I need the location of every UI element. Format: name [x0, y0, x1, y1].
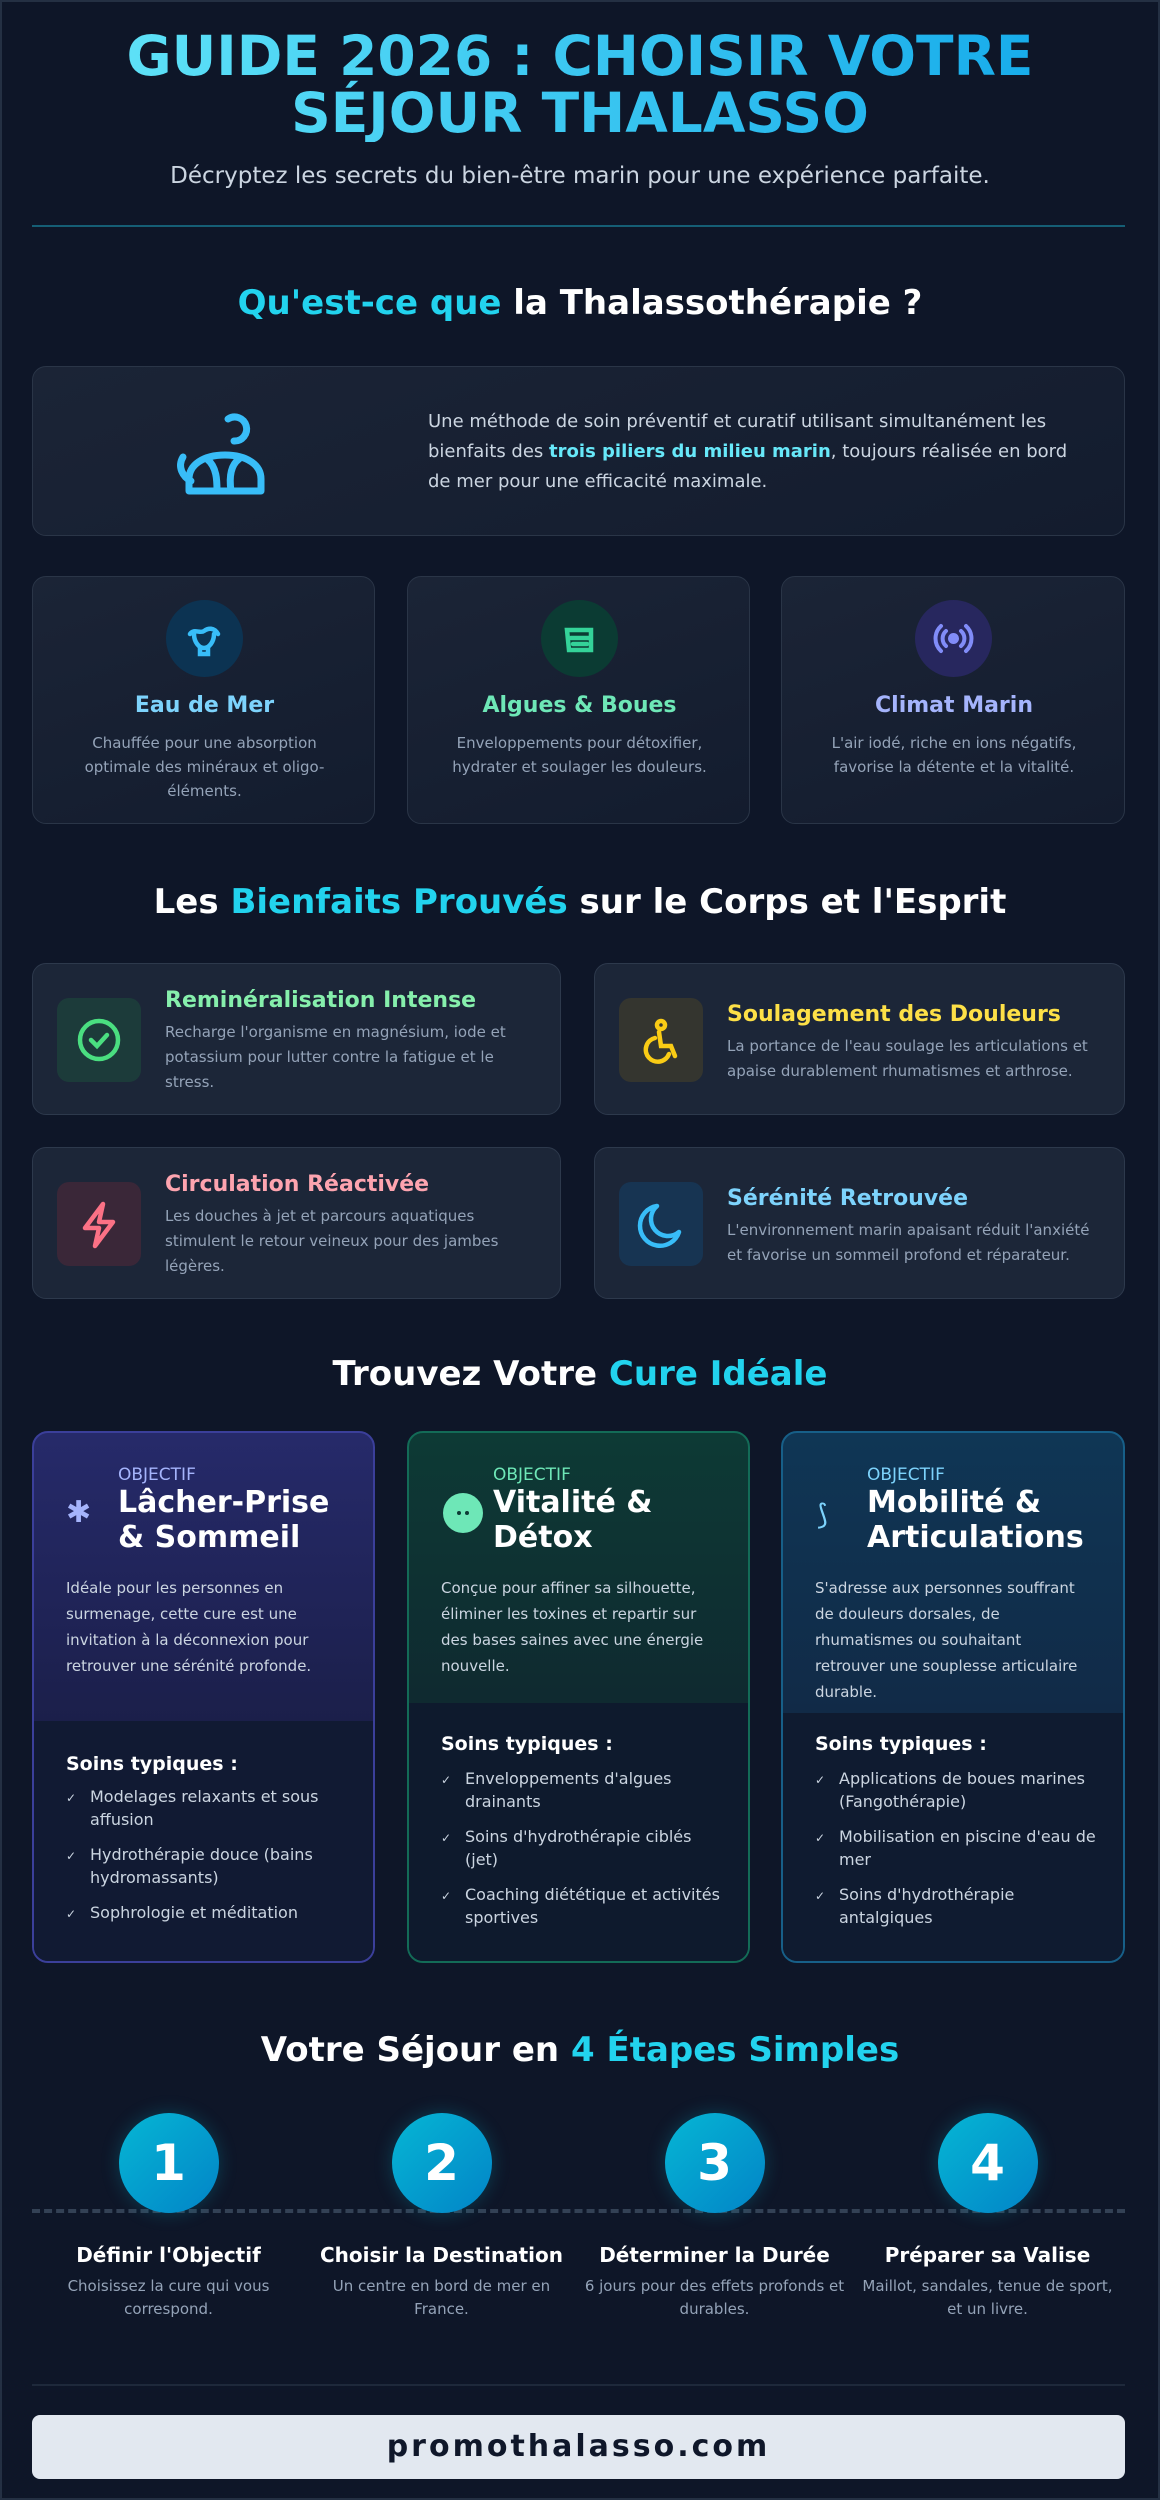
heading: cure: Trouvez Votre Cure Idéale: [333, 1354, 827, 1394]
step 2: Choisir la Destination: [320, 2243, 563, 2267]
panel: cure lacher-prise: OBJECTIF: [118, 1465, 196, 1485]
list: soins: [68, 1787, 318, 1922]
icon: seaweed: [541, 600, 618, 677]
icon: joint: ⟆: [817, 1498, 828, 1531]
step 1: [68, 2107, 269, 2318]
icon: check: [57, 998, 141, 1082]
icon: spa person: [177, 413, 264, 494]
panel: eau de mer: [32, 576, 375, 824]
list: soins: Enveloppements d'algues drainants: [465, 1769, 672, 1811]
panel: remineralisation: Reminéralisation Intense: [165, 988, 476, 1013]
panel: eau de mer: Chauffée pour une absorption optimale des minéraux et oligo-éléments.: [85, 734, 324, 800]
step 4: Préparer sa Valise: [885, 2243, 1090, 2267]
title: [0, 28, 1160, 142]
icon: wheelchair: [619, 998, 703, 1082]
footer: website: [32, 2415, 1125, 2479]
footer: website: promothalasso.com: [387, 2429, 770, 2464]
panel: serenite: [594, 1147, 1125, 1299]
step 3: [585, 2107, 844, 2318]
panel: cure vitalite: Conçue pour affiner sa silhouette, éliminer les toxines et repartir sur des bases saines avec une énergie nouvelle.: [441, 1579, 703, 1675]
panel: cure lacher-prise: Idéale pour les personnes en surmenage, cette cure est une invitation à la déconnexion pour retrouver une sérénité profonde.: [66, 1579, 311, 1675]
icon: moon: [619, 1182, 703, 1266]
icon: broadcast: [915, 600, 992, 677]
list: soins: Mobilisation en piscine d'eau de mer: [839, 1827, 1096, 1869]
panel: douleurs: [594, 963, 1125, 1115]
panel: climat: [781, 576, 1125, 824]
subtitle: Décryptez les secrets du bien-être marin pour une expérience parfaite.: [170, 163, 990, 189]
list: soins: Sophrologie et méditation: [90, 1903, 298, 1922]
panel: cure lacher-prise: [32, 1431, 375, 1963]
step 2: 2: [424, 2134, 459, 2192]
step 4: et un livre.: [947, 2300, 1028, 2318]
icon: water: [166, 600, 243, 677]
panel: serenite: Sérénité Retrouvée: [727, 1186, 968, 1211]
heading: bienfaits: Les Bienfaits Prouvés sur le Corps et l'Esprit: [154, 882, 1006, 922]
list: soins: Soins d'hydrothérapie ciblés (jet): [465, 1827, 691, 1869]
panel: cure vitalite: OBJECTIF: [493, 1465, 571, 1485]
title: GUIDE 2026 : CHOISIR VOTRE: [126, 24, 1034, 88]
list: soins: [816, 1769, 1096, 1927]
step 3: Déterminer la Durée: [599, 2243, 830, 2267]
step 1: Définir l'Objectif: [76, 2243, 261, 2267]
icon: face: [443, 1493, 483, 1533]
title: SÉJOUR THALASSO: [291, 81, 869, 145]
list: soins: Coaching diététique et activités sportives: [465, 1885, 720, 1927]
panel: algues: Algues & Boues: [482, 693, 677, 718]
list: soins: Modelages relaxants et sous affusion: [90, 1787, 318, 1829]
panel: cure mobilite: S'adresse aux personnes souffrant de douleurs dorsales, de rhumatismes ou souhaitant retrouver une souplesse articulaire durable.: [815, 1579, 1077, 1701]
list: soins: [442, 1769, 720, 1927]
panel: remineralisation: [32, 963, 561, 1115]
step 1: Choisissez la cure qui vous: [68, 2277, 269, 2295]
panel: climat: Climat Marin: [875, 693, 1033, 718]
step 1: correspond.: [124, 2300, 213, 2318]
panel: cure lacher-prise: Lâcher-Prise: [118, 1485, 329, 1520]
panel: cure mobilite: Mobilité &: [867, 1485, 1041, 1520]
panel: cure lacher-prise: & Sommeil: [118, 1520, 300, 1555]
icon: puzzle: ✱: [66, 1495, 91, 1530]
panel: cure mobilite: Soins typiques :: [815, 1733, 987, 1755]
panel: serenite: L'environnement marin apaisant réduit l'anxiété et favorise un sommeil profond et réparateur.: [727, 1221, 1089, 1264]
step 3: 6 jours pour des effets profonds et: [585, 2277, 844, 2295]
step 2: France.: [414, 2300, 469, 2318]
panel: cure lacher-prise: Soins typiques :: [66, 1753, 238, 1775]
panel: cure vitalite: Détox: [493, 1520, 593, 1555]
panel: cure mobilite: [781, 1431, 1125, 1963]
panel: climat: L'air iodé, riche en ions négatifs, favorise la détente et la vitalité.: [832, 734, 1076, 776]
panel: circulation: Circulation Réactivée: [165, 1172, 429, 1197]
panel: circulation: Les douches à jet et parcours aquatiques stimulent le retour veineux pour des jambes légères.: [165, 1207, 498, 1275]
panel: cure vitalite: [407, 1431, 750, 1963]
panel: algues: [407, 576, 750, 824]
panel: cure vitalite: Vitalité &: [493, 1485, 652, 1520]
step 4: 4: [970, 2134, 1005, 2192]
list: soins: Hydrothérapie douce (bains hydromassants): [90, 1845, 313, 1887]
panel: cure vitalite: Soins typiques :: [441, 1733, 613, 1755]
panel: douleurs: Soulagement des Douleurs: [727, 1002, 1061, 1027]
heading: etapes: Votre Séjour en 4 Étapes Simples: [261, 2030, 899, 2070]
step 1: 1: [151, 2134, 186, 2192]
icon: bolt: [57, 1182, 141, 1266]
panel: cure mobilite: OBJECTIF: [867, 1465, 945, 1485]
step 4: [862, 2107, 1113, 2318]
step 2: [320, 2107, 563, 2318]
panel: remineralisation: Recharge l'organisme en magnésium, iode et potassium pour lutter contre la fatigue et le stress.: [165, 1023, 506, 1091]
panel: eau de mer: Eau de Mer: [135, 693, 274, 718]
panel: douleurs: La portance de l'eau soulage les articulations et apaise durablement rhumatismes et arthrose.: [727, 1037, 1088, 1080]
heading: what is thalasso: Qu'est-ce que la Thalassothérapie ?: [238, 283, 922, 323]
panel: algues: Enveloppements pour détoxifier, hydrater et soulager les douleurs.: [452, 734, 707, 776]
panel: intro: [32, 366, 1125, 536]
text: intro description: Une méthode de soin préventif et curatif utilisant simultanément les bienfaits des trois piliers du milieu marin, toujours réalisée en bord de mer pour une efficacité maximale.: [428, 411, 1067, 492]
list: soins: Soins d'hydrothérapie antalgiques: [839, 1885, 1014, 1927]
step 4: Maillot, sandales, tenue de sport,: [862, 2277, 1113, 2295]
panel: circulation: [32, 1147, 561, 1299]
step 3: 3: [697, 2134, 732, 2192]
list: soins: Applications de boues marines (Fangothérapie): [839, 1769, 1085, 1811]
panel: cure mobilite: Articulations: [867, 1520, 1084, 1555]
step 2: Un centre en bord de mer en: [333, 2277, 550, 2295]
step 3: durables.: [680, 2300, 749, 2318]
